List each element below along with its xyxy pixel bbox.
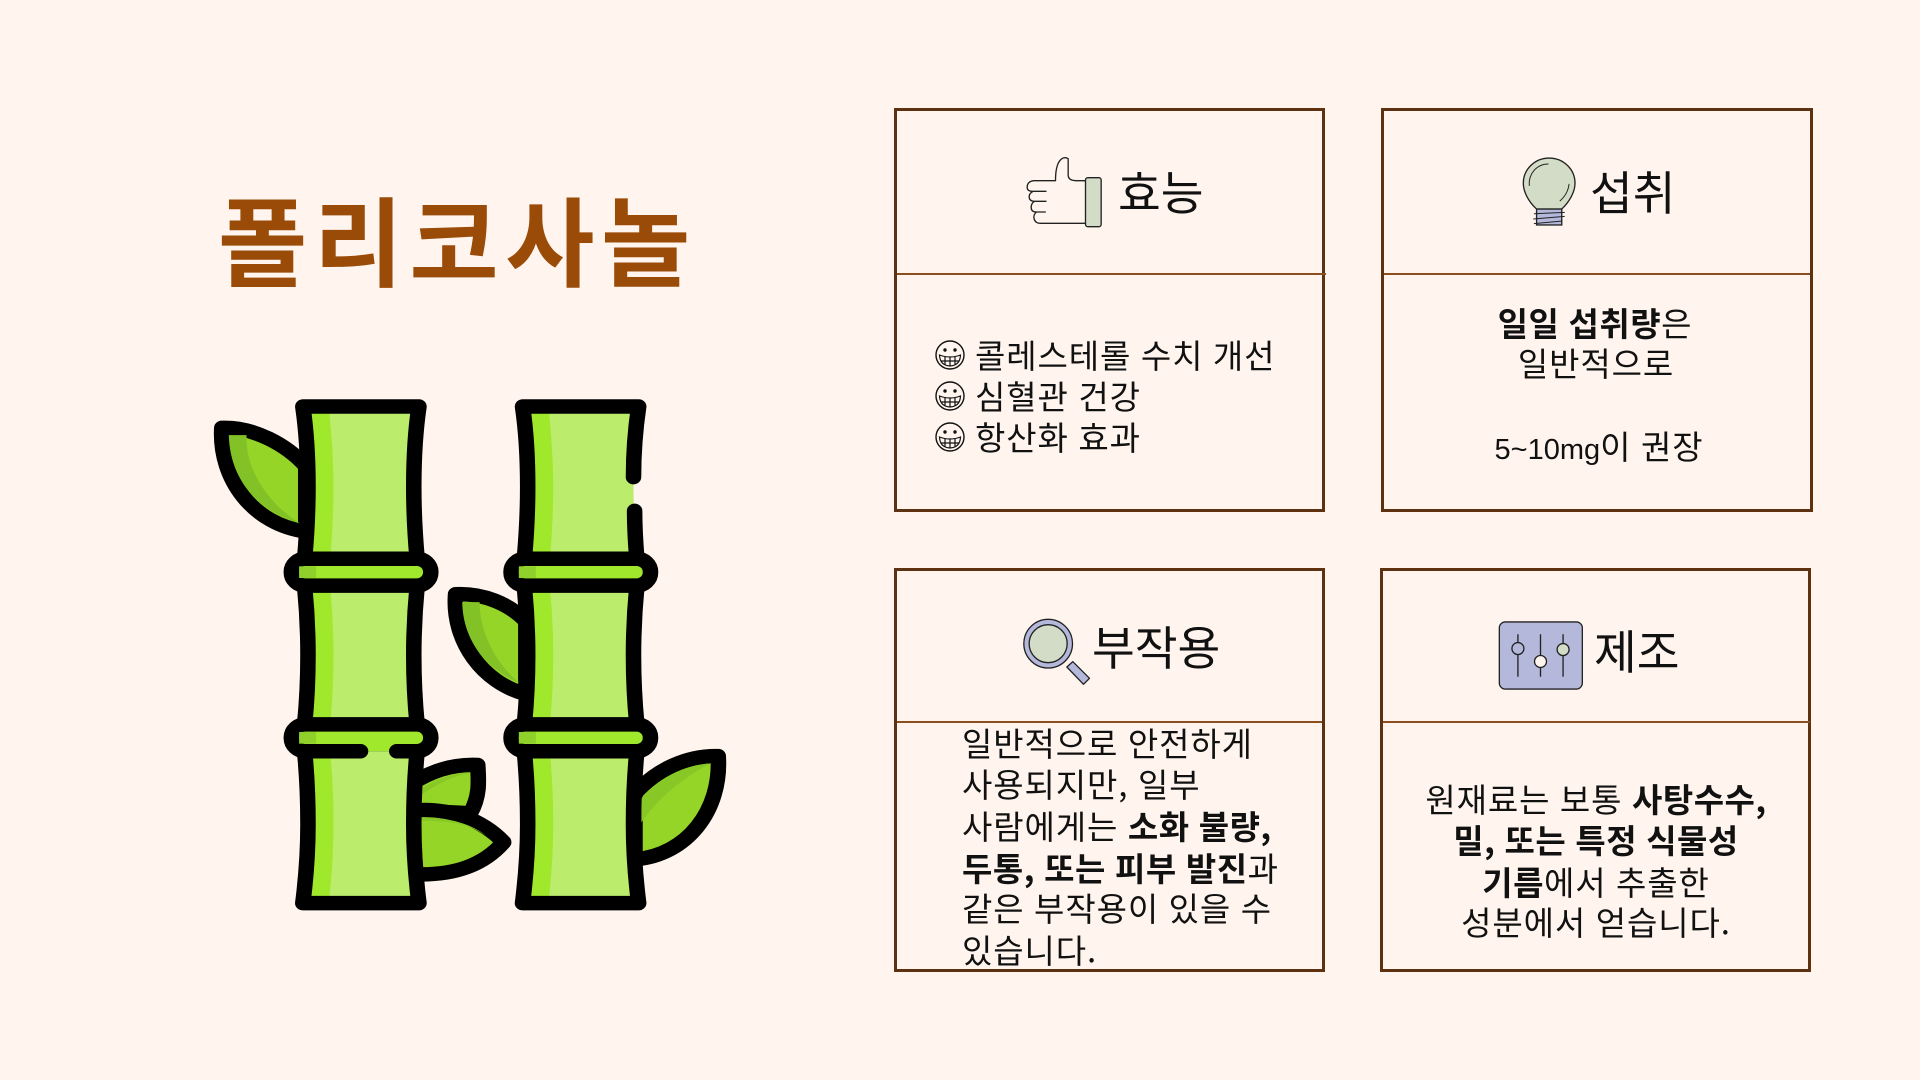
icon: grin [935,340,965,370]
heading: efficacy: 효능 [1118,157,1204,224]
icon: grin [935,422,965,452]
text: side effects description [962,718,1279,973]
text: side effects description: 사용되지만, 일부 [962,759,1200,807]
icon: grin [935,381,965,411]
icon: thumbs up [1026,157,1102,228]
text: manufacture description [1425,774,1767,945]
leaf: small lower [413,810,504,874]
leaf: lower right [635,756,718,859]
icon: sliders [1498,621,1583,690]
icon: light bulb [1522,157,1576,226]
text: side effects description: 사람에게는 소화 불량, [962,801,1272,849]
text: side effects description: 일반적으로 안전하게 [962,718,1253,766]
right stem [511,407,651,903]
heading: manufacture: 제조 [1594,616,1680,683]
text: daily dosage: 5~10mg이 권장 [1495,421,1703,469]
leaf: small upper [413,765,478,813]
icon: magnifier [1023,618,1090,685]
panel: intake [1381,108,1813,512]
list: benefits [935,330,1275,460]
text: side effects description: 있습니다. [962,925,1097,973]
text: daily dosage: 일일 섭취량은 [1498,298,1692,346]
panel: manufacture [1380,568,1811,972]
left stem [291,407,431,903]
text: manufacture description: 성분에서 얻습니다. [1461,897,1731,945]
leaf: upper left [222,428,306,532]
list: benefits: 콜레스테롤 수치 개선 [975,330,1275,378]
panel: side effects [894,568,1325,972]
text: daily dosage: 일반적으로 [1518,338,1674,386]
text: side effects description: 두통, 또는 피부 발진과 [962,843,1279,891]
heading: side effects: 부작용 [1092,612,1220,679]
illustration: bamboo [214,399,726,910]
panel: efficacy [894,108,1325,512]
leaf: middle [455,594,526,694]
title: 폴리코사놀 [218,166,697,307]
text: daily dosage [1495,298,1703,469]
list: benefits: 심혈관 건강 [975,371,1141,419]
list: benefits: 항산화 효과 [975,412,1141,460]
heading: intake: 섭취 [1590,157,1676,224]
text: manufacture description: 원재료는 보통 사탕수수, [1425,774,1767,822]
text: side effects description: 같은 부작용이 있을 수 [962,883,1272,931]
text: manufacture description: 기름에서 추출한 [1482,857,1710,905]
text: manufacture description: 밀, 또는 특정 식물성 [1453,815,1739,863]
